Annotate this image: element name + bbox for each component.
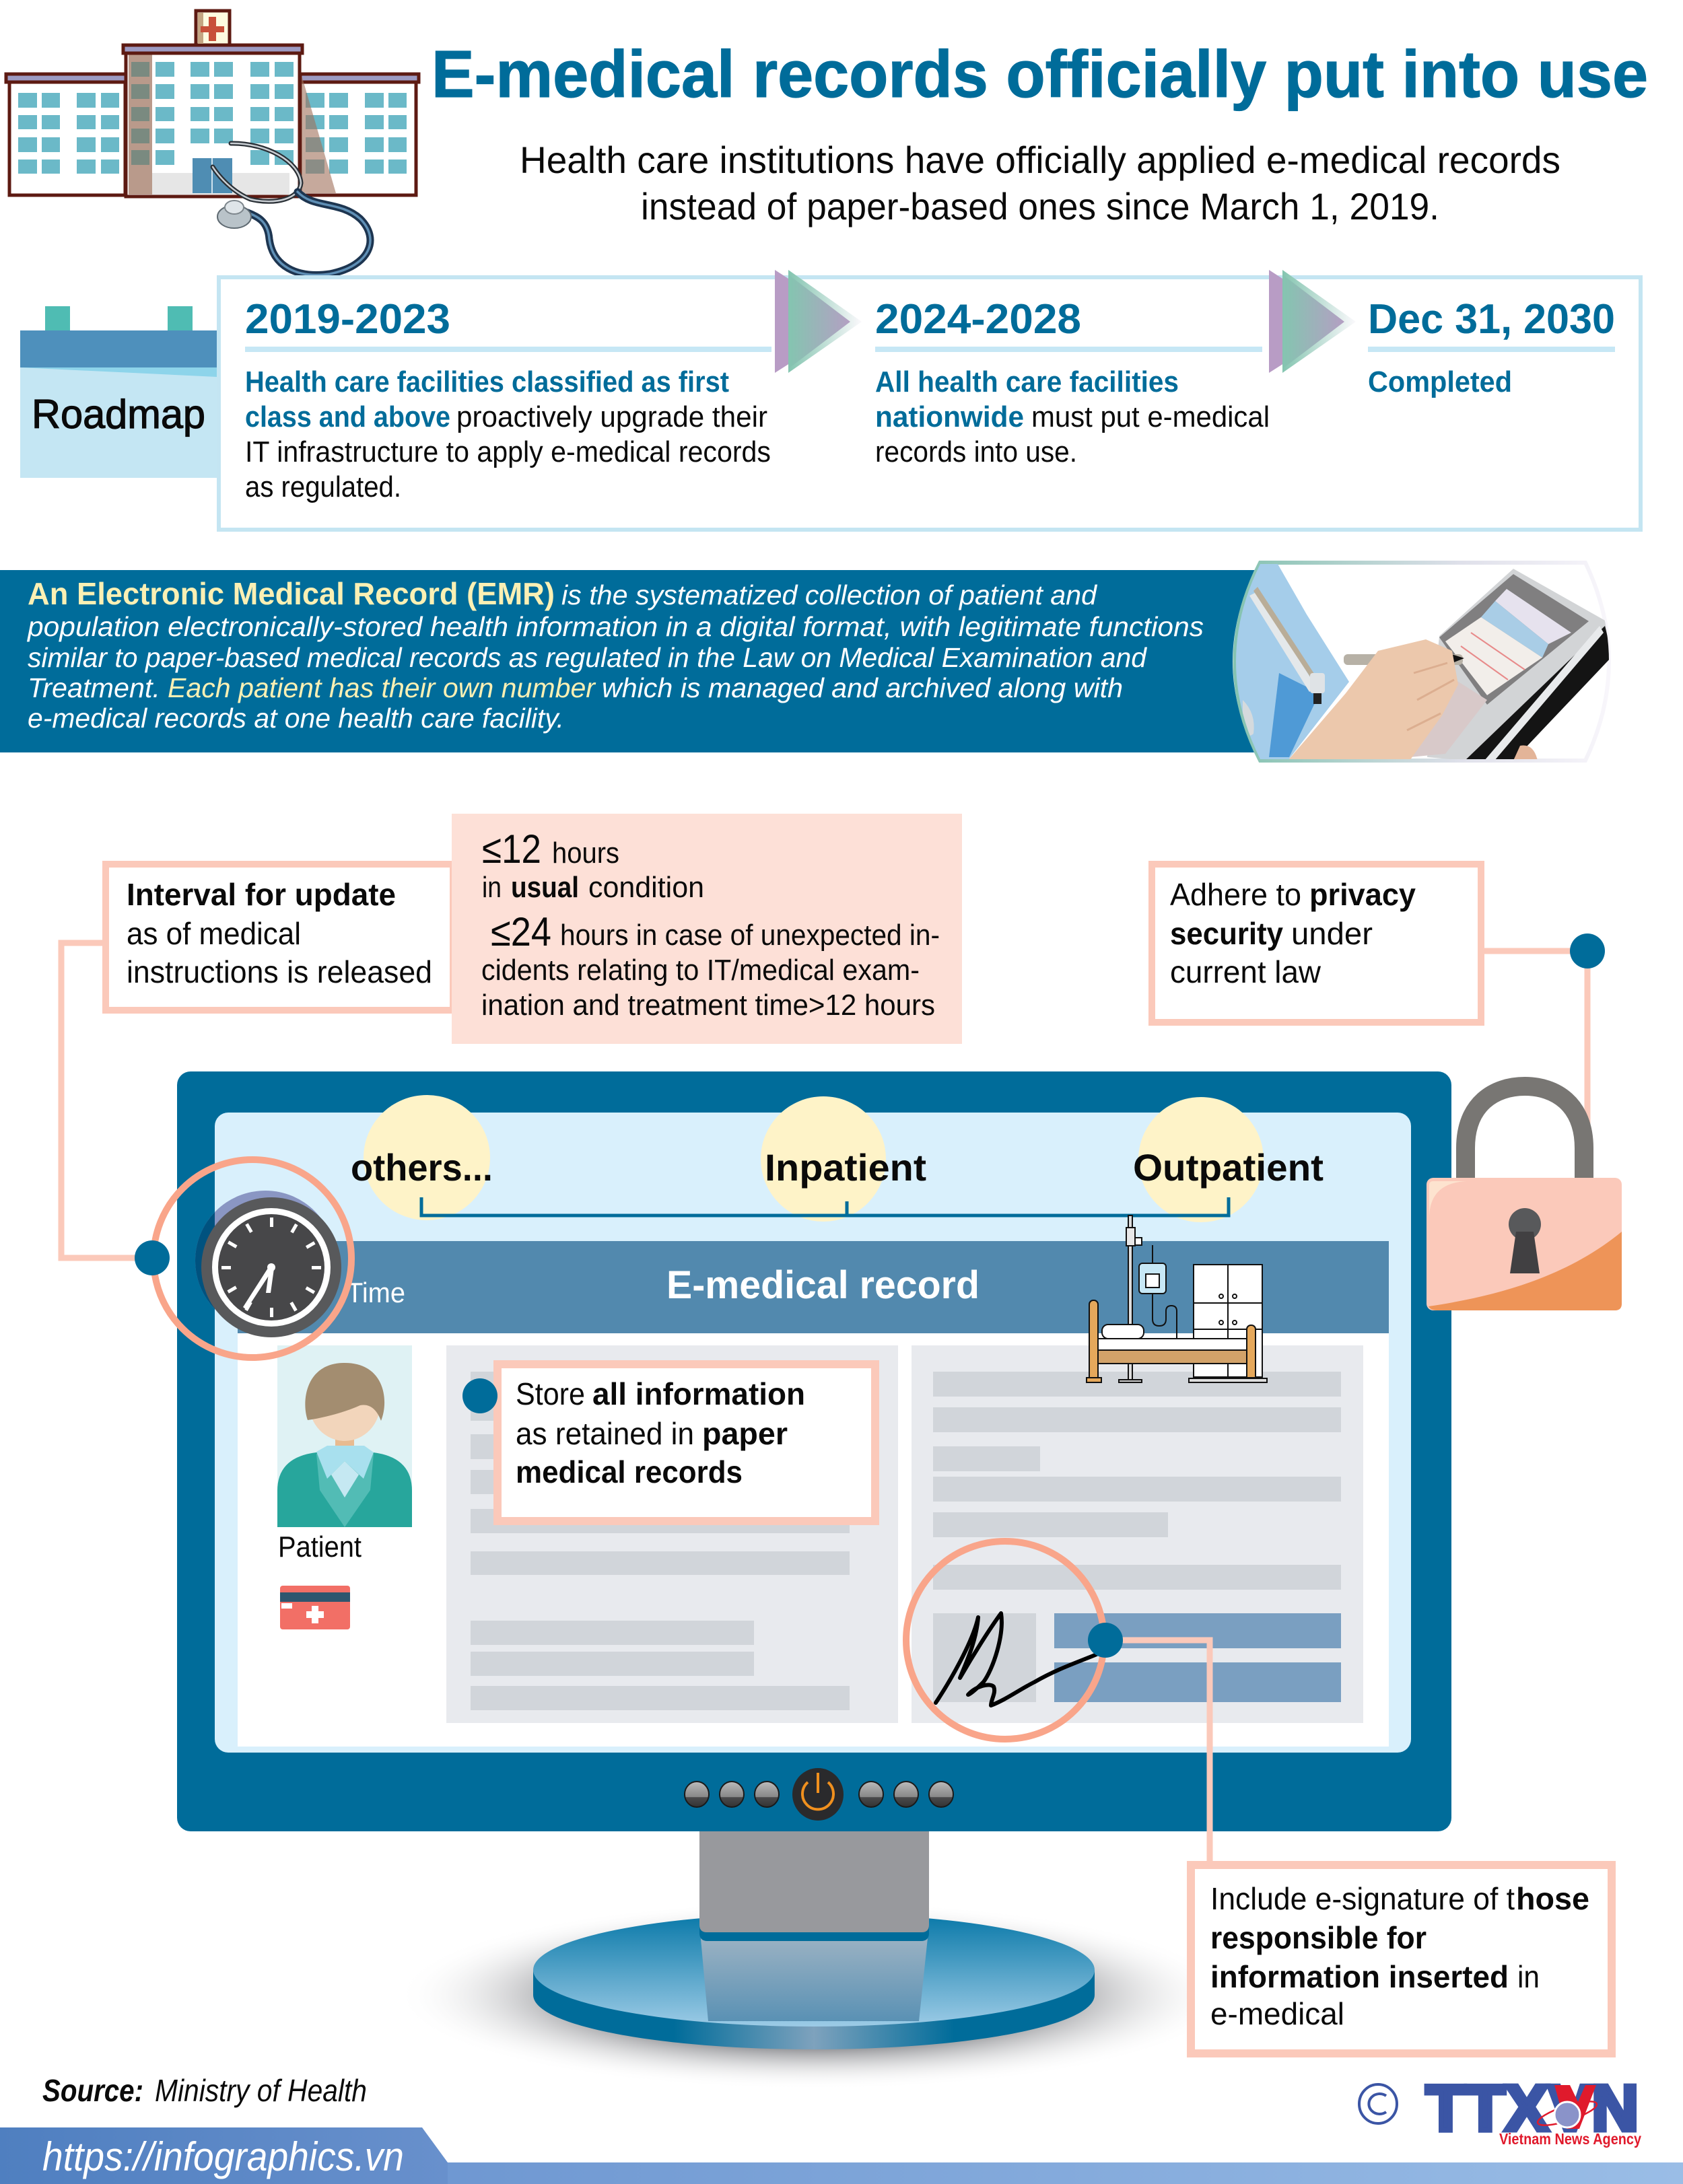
source (42, 2073, 367, 2108)
callout: time limits: cidents relating to IT/medical exam- (481, 954, 920, 987)
callout: stored information: all information (592, 1376, 805, 1411)
callout: privacy security: privacy (1309, 877, 1416, 912)
monitor (177, 1071, 1451, 1831)
EMR definition text: An Electronic Medical Record (EMR) (28, 576, 555, 611)
callout: e-signature: responsible for (1210, 1920, 1427, 1955)
hospital red cross sign (196, 11, 230, 45)
record type: others: others... (351, 1146, 493, 1189)
record header bar (238, 1241, 1389, 1333)
EMR definition text: Treatment. (28, 672, 160, 703)
EMR definition text (26, 576, 1204, 734)
copyright symbol (1359, 2084, 1397, 2123)
hospital right wing (300, 74, 419, 195)
callout: time limits: hours (552, 837, 619, 870)
roadmap stage 2024-2028: nationwide (875, 400, 1024, 433)
callout: e-signature: e-medical (1210, 1996, 1344, 2031)
connector: signature to e-signature box (1105, 1640, 1210, 1864)
record type: others (351, 1095, 493, 1220)
icon: hospital bed and drip (1087, 1216, 1267, 1382)
connector: privacy box to lock (1484, 951, 1587, 1124)
callout: e-signature: in (1517, 1959, 1540, 1994)
roadmap stage 2019-2023: IT infrastructure to apply e-medical records (245, 435, 771, 468)
icon: hospital with stethoscope (6, 11, 419, 275)
callout: time limits: in (482, 871, 502, 904)
logo: TTXVN: TTXVN (1426, 2072, 1639, 2144)
callout: privacy security: Adhere to (1170, 877, 1301, 912)
time label: Time (347, 1277, 405, 1308)
callout: e-signature (1191, 1865, 1612, 2053)
roadmap stage Dec 31, 2030: Dec 31, 2030 (1368, 296, 1615, 343)
callout: privacy security (1152, 864, 1481, 1022)
panel: EMR definition banner (0, 570, 1256, 752)
callout: time limits: condition (588, 871, 704, 904)
callout: stored information (497, 1364, 875, 1521)
subtitle: Health care institutions have officially applied e-medical records (520, 139, 1560, 181)
roadmap stage Dec 31, 2030 (1368, 296, 1615, 398)
EMR definition text: similar to paper-based medical records as regulated in the Law on Medical Examination and (28, 642, 1147, 673)
icon: roadmap calendar (20, 306, 217, 478)
callout: privacy security: under (1291, 916, 1373, 951)
callout: stored information: medical records (516, 1454, 743, 1489)
arrow: second chevron (1269, 270, 1356, 373)
icon: health card (280, 1586, 350, 1629)
logo: TTXVN: Vietnam News Agency (1499, 2130, 1641, 2148)
arrow: first chevron (775, 270, 862, 373)
record type: outpatient: Outpatient (1133, 1146, 1324, 1189)
connector dot: privacy (1570, 934, 1605, 968)
hospital left wing (6, 74, 126, 195)
source: Ministry of Health (155, 2073, 367, 2108)
callout: time limits (452, 814, 962, 1044)
roadmap stage 2019-2023: as regulated. (245, 470, 401, 503)
callout: time limits: usual (511, 871, 579, 904)
callout: stored information: Store (516, 1376, 585, 1411)
EMR definition text: e-medical records at one health care facility. (28, 703, 564, 734)
icon: padlock (1427, 1086, 1622, 1310)
connector dot: signature (1088, 1623, 1123, 1658)
record type: inpatient: Inpatient (765, 1146, 926, 1189)
roadmap stage 2024-2028 (875, 296, 1270, 468)
connector dot: stored information (462, 1378, 497, 1413)
connector: interval box to clock (61, 943, 152, 1258)
subtitle: instead of paper-based ones since March 1, 2019. (641, 185, 1439, 227)
callout: time limits: ≤12 (482, 826, 541, 872)
roadmap stage 2024-2028: must put e-medical (1031, 400, 1270, 433)
roadmap stage 2019-2023: 2019-2023 (245, 296, 450, 343)
patient profile: Patient (278, 1530, 362, 1563)
roadmap stage 2024-2028: All health care facilities (875, 365, 1179, 398)
callout: e-signature: Include e-signature of t (1210, 1881, 1515, 1916)
roadmap stage Dec 31, 2030: Completed (1368, 365, 1512, 398)
stethoscope (213, 143, 370, 275)
EMR definition text: Each patient has their own number (168, 672, 596, 703)
footer band (0, 2127, 1683, 2184)
title: E-medical records officially put into use (432, 37, 1648, 111)
record panel: information (446, 1345, 898, 1723)
callout: time limits: hours in case of unexpected in- (560, 919, 940, 952)
callout: stored information: as retained in (516, 1416, 694, 1451)
callout: interval for update: instructions is released (127, 954, 432, 989)
roadmap stage 2024-2028: 2024-2028 (875, 296, 1081, 343)
picture: doctor using tablet (1225, 563, 1612, 761)
EMR definition text: which is managed and archived along with (602, 672, 1123, 703)
subtitle (520, 139, 1560, 227)
icon: clock with highlight ring (153, 1160, 351, 1358)
hospital central block (123, 45, 302, 197)
roadmap label: Roadmap (32, 392, 205, 437)
connector dot: clock (135, 1240, 170, 1275)
callout: stored information: paper (702, 1416, 788, 1451)
roadmap stage 2019-2023: class and above (245, 400, 450, 433)
callout: interval for update (106, 864, 453, 1010)
source: Source: (42, 2073, 143, 2108)
record header bar: E-medical record (666, 1263, 980, 1307)
record type: inpatient (761, 1096, 926, 1222)
callout: e-signature: information inserted (1210, 1959, 1509, 1994)
roadmap stage 2019-2023 (245, 296, 771, 503)
patient profile (277, 1345, 412, 1629)
record panel: signature area (912, 1345, 1363, 1723)
callout: time limits: ination and treatment time>12 hours (481, 989, 935, 1022)
callout: privacy security: current law (1170, 954, 1321, 989)
website url: https://infographics.vn (42, 2134, 404, 2179)
EMR definition text: population electronically-stored health information in a digital format, with legitimate functions (26, 611, 1204, 642)
icon: signature with highlight ring (906, 1541, 1104, 1739)
callout: privacy security: security (1170, 916, 1283, 951)
roadmap stage 2019-2023: proactively upgrade their (456, 400, 767, 433)
monitor stand and base (397, 1831, 1231, 2090)
callout: e-signature: hose (1516, 1881, 1589, 1916)
callout: time limits: ≤24 (491, 909, 551, 954)
callout: interval for update: as of medical (127, 916, 301, 951)
record type: outpatient (1133, 1097, 1324, 1222)
roadmap stage 2024-2028: records into use. (875, 435, 1077, 468)
bracket linking record types (421, 1197, 1229, 1216)
callout: interval for update: Interval for update (127, 877, 396, 912)
icon: patient avatar (277, 1363, 412, 1527)
roadmap stage 2019-2023: Health care facilities classified as first (245, 365, 729, 398)
panel: roadmap timeline (219, 270, 1641, 530)
monitor control buttons (685, 1768, 953, 1821)
EMR definition text: is the systematized collection of patient and (561, 579, 1097, 610)
